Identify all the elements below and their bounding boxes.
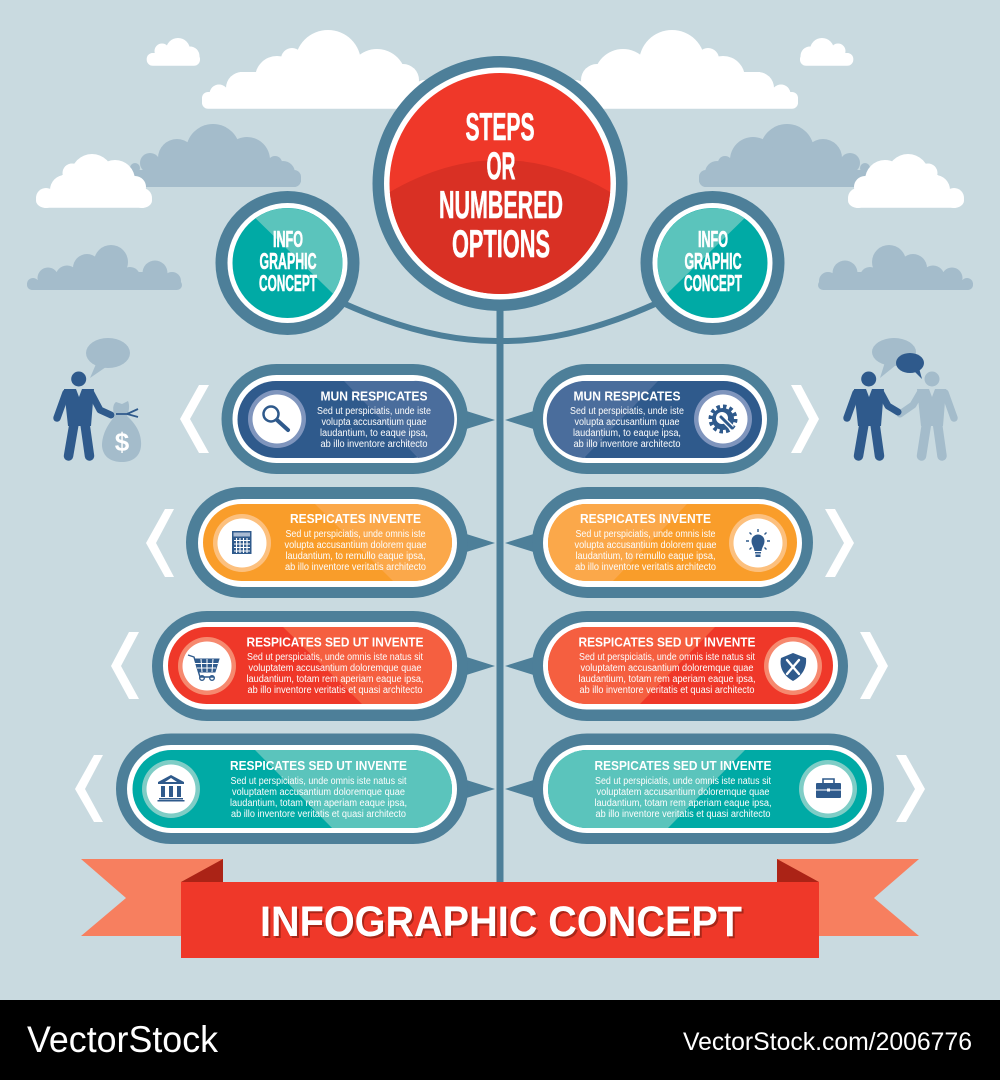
text: left row 4: ab illo inventore veritatis et quasi architecto [231, 809, 406, 820]
text: right row 4: Sed ut perspiciatis, unde omnis iste natus sit [595, 776, 771, 787]
text: right row 1: laudantium, to eaque ipsa, [573, 428, 681, 439]
icon: shield with crossed tools [781, 653, 806, 681]
text: right row 1: Sed ut perspiciatis, unde iste [570, 406, 684, 417]
main circle heading: OPTIONS [452, 223, 550, 266]
figure: man with money bag: $ [115, 427, 130, 457]
text: left row 1: ab illo inventore architecto [320, 439, 428, 450]
icon: magnifier [264, 406, 288, 430]
arrow: left row 4 [75, 755, 103, 822]
text: left row 1: laudantium, to eaque ipsa, [320, 428, 428, 439]
right small circle heading [684, 226, 742, 296]
text: left row 2: Sed ut perspiciatis, unde omnis iste [286, 529, 426, 540]
text: left row 1: volupta accusantium quae [322, 417, 427, 428]
panel: right row 3 red [505, 611, 848, 721]
figure: man with money bag [57, 338, 141, 462]
main circle heading: NUMBERED [439, 184, 563, 227]
text: right row 2: RESPICATES INVENTE [580, 511, 711, 526]
left small circle [216, 191, 360, 335]
icon: light bulb [746, 529, 770, 557]
text: left row 2 [284, 511, 427, 573]
text: left row 4: RESPICATES SED UT INVENTE [230, 758, 407, 773]
text: right row 3: ab illo inventore veritatis et quasi architecto [580, 685, 755, 696]
main circle heading [439, 106, 563, 266]
text: right row 2: laudantium, to remullo eaque ipsa, [576, 551, 716, 562]
text: left row 4: Sed ut perspiciatis, unde omnis iste natus sit [230, 776, 407, 787]
panel: right row 4 teal [505, 734, 884, 844]
text: left row 4: voluptatem accusantium doloremque quae [232, 787, 405, 798]
text: right row 1: MUN RESPICATES [574, 388, 681, 404]
arrow: right row 1 [791, 385, 819, 453]
panel: left row 2 orange [186, 487, 495, 598]
connector: vertical stem [496, 305, 504, 885]
left small circle heading: GRAPHIC [260, 248, 316, 274]
text: left row 3: RESPICATES SED UT INVENTE [246, 634, 424, 650]
text: left row 1: MUN RESPICATES [320, 388, 428, 404]
banner heading: INFOGRAPHIC CONCEPT [260, 898, 742, 946]
left small circle heading: CONCEPT [259, 270, 317, 296]
panel: right row 1 blue [505, 364, 778, 474]
text: right row 3: laudantium, totam rem aperiam eaque ipsa, [578, 674, 756, 685]
panel: right row 2 orange [505, 487, 813, 598]
right small circle heading: GRAPHIC [684, 248, 742, 274]
text: right row 1 [570, 388, 684, 450]
panel: left row 1 blue [222, 364, 495, 474]
text: left row 4: laudantium, totam rem aperiam eaque ipsa, [230, 798, 407, 809]
connector: curved branch [345, 304, 655, 341]
text: right row 4: laudantium, totam rem aperiam eaque ipsa, [594, 798, 772, 809]
banner ribbon [81, 859, 919, 958]
text: left row 3: Sed ut perspiciatis, unde omnis iste natus sit [247, 652, 423, 663]
text: right row 1: volupta accusantium quae [574, 417, 680, 428]
footer logo: VectorStock [27, 1019, 218, 1060]
clouds: right [561, 30, 973, 290]
panel: left row 4 teal [116, 734, 495, 844]
footer bar [0, 1000, 1000, 1080]
text: left row 2: volupta accusantium dolorem quae [284, 540, 427, 551]
arrow: left row 1 [180, 385, 209, 453]
icon: calculator [232, 531, 252, 554]
banner heading: INFOGRAPHIC CONCEPT [262, 900, 744, 948]
text: left row 2: ab illo inventore veritatis architecto [285, 562, 426, 573]
text: left row 2: RESPICATES INVENTE [290, 511, 421, 526]
text: right row 2: Sed ut perspiciatis, unde omnis iste [576, 529, 716, 540]
text: right row 4: RESPICATES SED UT INVENTE [594, 758, 772, 773]
left small circle heading [259, 226, 317, 296]
icon: briefcase [816, 779, 841, 798]
text: right row 2: volupta accusantium dolorem quae [574, 540, 717, 551]
icon: gear and wrench [710, 406, 736, 432]
text: left row 3 [246, 634, 424, 696]
text: right row 3 [578, 634, 756, 696]
figure: two men shaking hands [847, 338, 954, 456]
right small circle [640, 191, 784, 335]
text: right row 4: voluptatem accusantium doloremque quae [596, 787, 770, 798]
panel: left row 3 red [152, 611, 495, 721]
arrow: right row 2 [825, 509, 854, 577]
arrow: right row 4 [896, 755, 925, 822]
text: right row 3: Sed ut perspiciatis, unde omnis iste natus sit [579, 652, 755, 663]
icon: shopping cart [188, 655, 219, 680]
text: right row 4: ab illo inventore veritatis et quasi architecto [596, 809, 771, 820]
text: left row 3: laudantium, totam rem aperiam eaque ipsa, [246, 674, 424, 685]
text: right row 2 [574, 511, 717, 573]
text: left row 4 [230, 758, 407, 820]
left small circle heading: INFO [273, 226, 303, 252]
footer id: VectorStock.com/2006776 [683, 1028, 972, 1056]
text: left row 2: laudantium, to remullo eaque ipsa, [286, 551, 426, 562]
text: right row 3: voluptatem accusantium doloremque quae [580, 663, 754, 674]
arrow: right row 3 [860, 632, 888, 699]
text: left row 3: voluptatem accusantium doloremque quae [248, 663, 422, 674]
text: right row 2: ab illo inventore veritatis architecto [575, 562, 716, 573]
text: right row 4 [594, 758, 772, 820]
main circle heading: STEPS [466, 106, 534, 149]
clouds: left [27, 30, 439, 290]
text: left row 1: Sed ut perspiciatis, unde iste [317, 406, 431, 417]
right small circle heading: CONCEPT [684, 270, 742, 296]
text: right row 3: RESPICATES SED UT INVENTE [578, 634, 756, 650]
text: right row 1: ab illo inventore architecto [574, 439, 681, 450]
main circle heading: OR [486, 145, 516, 188]
right small circle heading: INFO [698, 226, 728, 252]
main circle [372, 56, 628, 311]
text: left row 3: ab illo inventore veritatis et quasi architecto [248, 685, 423, 696]
arrow: left row 2 [146, 509, 174, 577]
text: left row 1 [317, 388, 431, 450]
icon: bank building [158, 775, 184, 802]
arrow: left row 3 [111, 632, 139, 699]
